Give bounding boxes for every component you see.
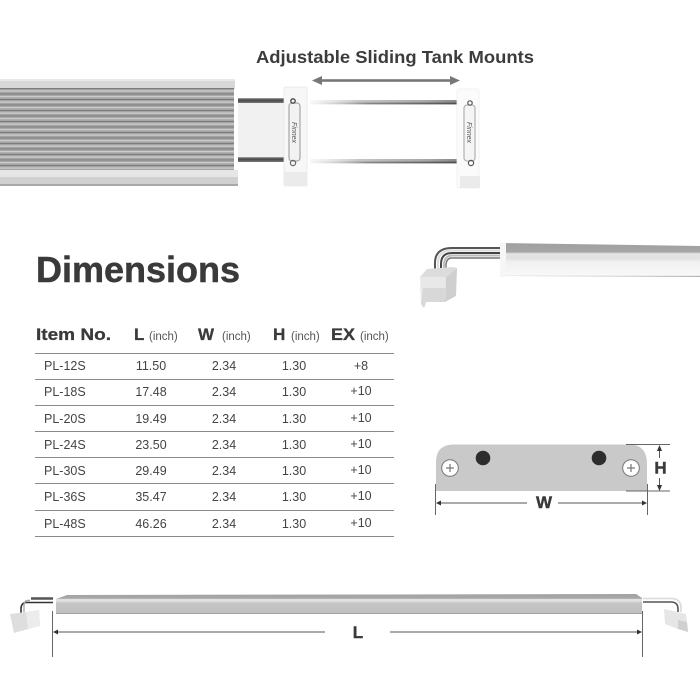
screw right bbox=[623, 460, 639, 476]
top rail bbox=[0, 79, 235, 89]
table rows: 19.49 bbox=[135, 412, 167, 426]
end plate bbox=[436, 444, 647, 491]
table rows: 35.47 bbox=[135, 490, 167, 504]
cross-section diagram with W and H bbox=[436, 444, 670, 515]
table rows: +10 bbox=[350, 437, 372, 451]
table rules bbox=[35, 353, 394, 537]
table rows: 46.26 bbox=[135, 517, 167, 531]
table header: W bbox=[198, 325, 215, 344]
table rows: PL-24S bbox=[44, 438, 86, 452]
brand mark: Finnex bbox=[290, 122, 297, 144]
table rows bbox=[44, 359, 372, 531]
table rows: 2.34 bbox=[212, 490, 236, 504]
table rows: PL-20S bbox=[44, 412, 86, 426]
table header bbox=[36, 325, 389, 344]
table rows: 1.30 bbox=[282, 517, 306, 531]
table header: (inch) bbox=[149, 331, 178, 343]
H dimension bbox=[626, 444, 670, 491]
table header: Item No. bbox=[36, 325, 111, 344]
table rows: 29.49 bbox=[135, 464, 167, 478]
table rows: PL-18S bbox=[44, 385, 86, 399]
table rows: 1.30 bbox=[282, 464, 306, 478]
light bar bbox=[500, 243, 700, 277]
heading: adjustable sliding tank mounts: Adjustable Sliding Tank Mounts bbox=[256, 47, 534, 67]
side view of light with mount bbox=[420, 243, 700, 308]
table rows: 2.34 bbox=[212, 438, 236, 452]
rods bbox=[435, 248, 501, 272]
table rows: 2.34 bbox=[212, 464, 236, 478]
mounting hole left bbox=[476, 451, 490, 465]
full-length light bar, front view bbox=[10, 594, 688, 633]
table rows: +10 bbox=[350, 384, 372, 398]
ghost rods and mount at extended position bbox=[310, 89, 480, 188]
table rows: PL-36S bbox=[44, 490, 86, 504]
table header: (inch) bbox=[222, 331, 251, 343]
table rows: +10 bbox=[350, 489, 372, 503]
table rows: 23.50 bbox=[135, 438, 167, 452]
left mount bbox=[10, 598, 53, 633]
table rows: 17.48 bbox=[135, 385, 167, 399]
L dimension bbox=[52, 611, 642, 657]
table header: L bbox=[134, 325, 144, 344]
table rows: 1.30 bbox=[282, 385, 306, 399]
table rows: +8 bbox=[354, 359, 368, 373]
table header: EX bbox=[331, 325, 356, 344]
mount clip bbox=[420, 267, 457, 308]
table rows: 2.34 bbox=[212, 359, 236, 373]
W dimension bbox=[436, 484, 648, 515]
table rows: +10 bbox=[350, 411, 372, 425]
table rows: PL-12S bbox=[44, 359, 86, 373]
table bbox=[35, 325, 394, 537]
mounting hole right bbox=[592, 451, 606, 465]
table rows: 11.50 bbox=[136, 359, 166, 373]
arrow: sliding range bbox=[312, 76, 460, 85]
heat-sink fins bbox=[0, 88, 234, 170]
table rows: PL-30S bbox=[44, 464, 86, 478]
table header: (inch) bbox=[291, 331, 320, 343]
table rows: PL-48S bbox=[44, 517, 86, 531]
title: dimensions: Dimensions bbox=[36, 249, 240, 290]
table rows: +10 bbox=[350, 516, 372, 530]
table rows: 1.30 bbox=[282, 490, 306, 504]
table rows: 2.34 bbox=[212, 385, 236, 399]
table rows: 2.34 bbox=[212, 517, 236, 531]
right mount bbox=[643, 598, 688, 632]
brand mark: Finnex bbox=[465, 122, 472, 144]
table header: H bbox=[273, 325, 285, 344]
table rows: 1.30 bbox=[282, 438, 306, 452]
light fixture close-up bbox=[0, 79, 238, 186]
bottom rail bbox=[0, 170, 238, 186]
table rows: 1.30 bbox=[282, 359, 306, 373]
W dimension: W bbox=[536, 493, 553, 512]
H dimension: H bbox=[654, 458, 667, 478]
table rows: 2.34 bbox=[212, 412, 236, 426]
table rows: +10 bbox=[350, 463, 372, 477]
table rows: 1.30 bbox=[282, 412, 306, 426]
screw left bbox=[442, 460, 458, 476]
table header: (inch) bbox=[360, 331, 389, 343]
L dimension: L bbox=[353, 623, 363, 642]
mount at light end bbox=[238, 87, 307, 186]
